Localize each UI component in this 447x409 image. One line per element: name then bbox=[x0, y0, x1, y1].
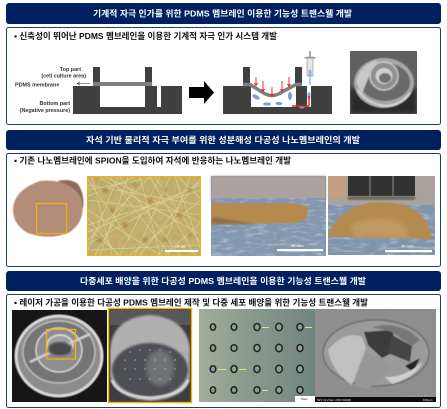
heading: section 1 banner bbox=[6, 3, 441, 24]
diagram: transwell before stimulation: (Negative pressure) bbox=[20, 108, 70, 114]
diagram: transwell under negative pressure bbox=[223, 51, 332, 114]
text: SEM info bar: 100μm bbox=[423, 398, 433, 402]
text: scale bar 30 mm: 30 mm bbox=[291, 243, 304, 248]
heading: section 1 banner: 기계적 자극 인가를 위한 PDMS 멤브레인 이용한 기능성 트랜스웰 개발 bbox=[93, 8, 352, 18]
image: transwell on dark background bbox=[12, 310, 107, 402]
image: flat membrane side view bbox=[211, 176, 326, 256]
icon: syringe bbox=[304, 51, 316, 85]
image: micrograph of laser-drilled pore array bbox=[199, 309, 315, 402]
image: magnetic membrane disc bbox=[12, 179, 84, 238]
image: fibre micrograph bbox=[87, 176, 201, 256]
diagram: transwell before stimulation: Top part bbox=[60, 67, 81, 73]
diagram: transwell before stimulation: Bottom part bbox=[39, 101, 70, 107]
diagram: transwell before stimulation bbox=[15, 67, 182, 114]
heading: section 2 banner: 자석 기반 물리적 자극 부여를 위한 성분해성 다공성 나노멤브레인의 개발 bbox=[86, 135, 360, 145]
text: scale bar 30 mm: 30 mm bbox=[401, 244, 414, 248]
icon: dimension markers bbox=[218, 327, 312, 391]
heading: section 3 banner bbox=[6, 271, 441, 291]
text: scale bar 150 µm: 150 μm bbox=[175, 244, 186, 248]
arrow: process direction bbox=[189, 81, 214, 104]
text: micrograph scale label: 50μm bbox=[301, 398, 308, 401]
icon: blue cells bbox=[252, 92, 310, 108]
icon: yellow selection square bbox=[46, 330, 76, 359]
image: membrane compressed by magnet bbox=[328, 176, 435, 255]
diagram: transwell before stimulation: PDMS membrane bbox=[15, 82, 59, 88]
image: SEM pore close-up bbox=[315, 309, 436, 402]
panel: section 3 porous membrane bbox=[6, 294, 440, 408]
heading: section 3 banner: 다중세포 배양을 위한 다공성 PDMS 멤브레인을 이용한 기능성 트랜스웰 개발 bbox=[80, 276, 366, 286]
image: magnified porous well bbox=[108, 308, 192, 402]
panel: section 1 mechanical stimulation bbox=[6, 28, 440, 124]
text: SEM info bar: 5kV 11.2mm x500 SE(M) bbox=[317, 398, 351, 402]
image: PDMS transwell photo bbox=[350, 51, 417, 114]
diagram: transwell before stimulation: (cell culture area) bbox=[41, 74, 86, 80]
text: section 2 bullet statement: ▪ 기존 나노멤브레인에 SPION을 도입하여 자석에 반응하는 나노멤브레인 개발 bbox=[14, 156, 291, 166]
icon: red downward arrows bbox=[254, 77, 290, 96]
icon: yellow selection square bbox=[36, 204, 66, 234]
text: SEM info bar bbox=[315, 396, 436, 402]
icon: magnet blocks bbox=[348, 176, 415, 200]
text: section 3 bullet statement: ▪ 레이저 가공을 이용한 다공성 PDMS 멤브레인 제작 및 다중 세포 배양을 위한 기능성 트랜스웰 개발 bbox=[14, 298, 368, 308]
panel: section 2 magnetic nanomembrane bbox=[6, 154, 440, 266]
heading: section 2 banner bbox=[6, 130, 441, 150]
text: section 1 bullet statement: ▪ 신축성이 뛰어난 PDMS 멤브레인을 이용한 기계적 자극 인가 시스템 개발 bbox=[14, 31, 277, 41]
